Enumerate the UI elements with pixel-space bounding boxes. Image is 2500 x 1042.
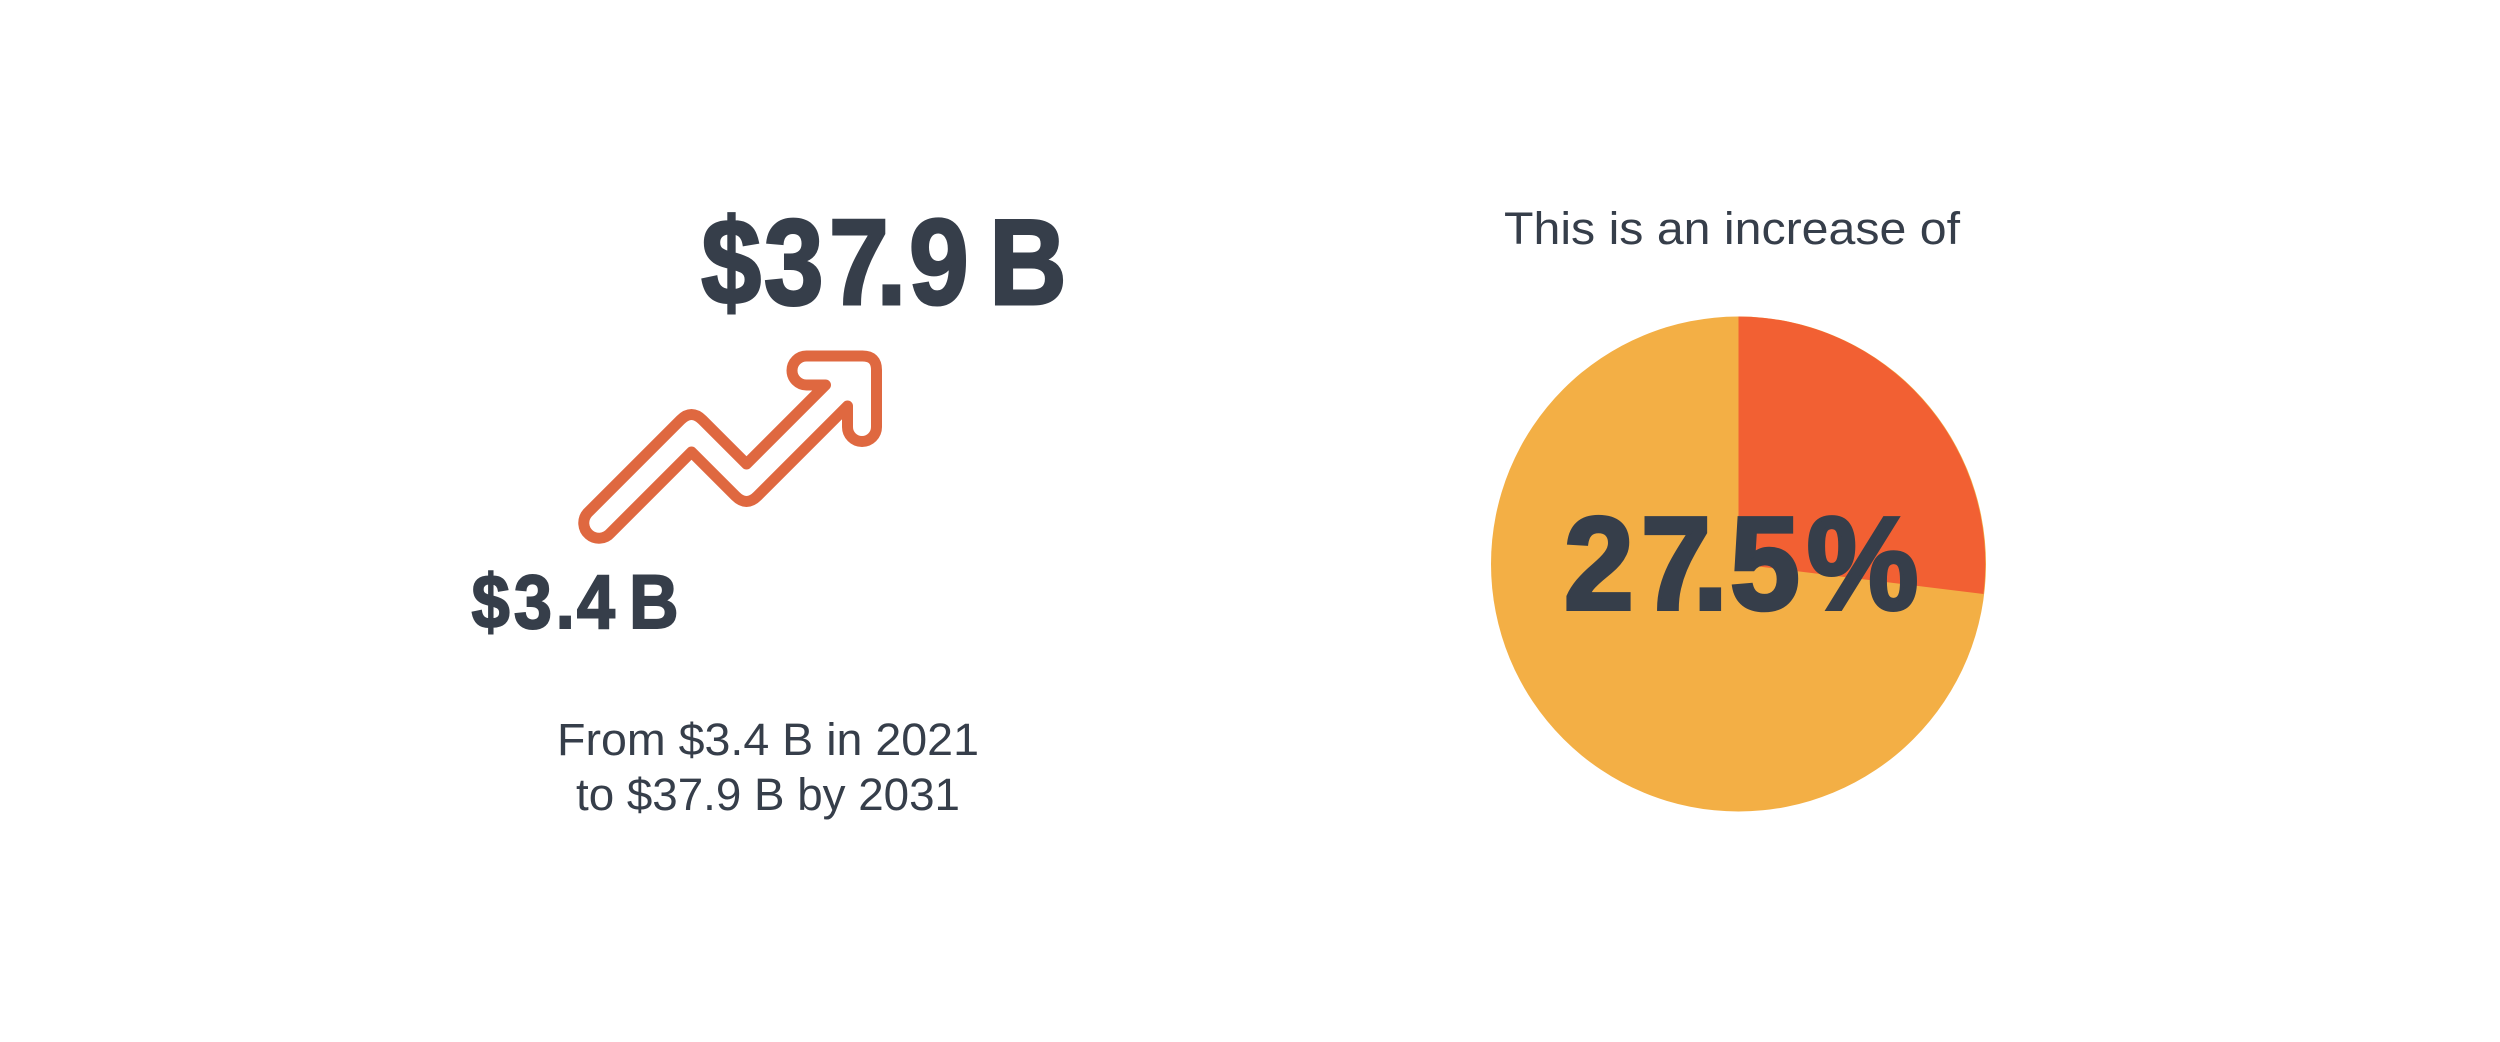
label: 27.5 percent: 27.5% (1564, 490, 1918, 638)
text block: date range (557, 714, 979, 820)
text block: date range: to $37.9 B by 2031 (576, 769, 960, 820)
heading: increase caption: This is an increase of (1504, 203, 1961, 254)
text block: date range: From $3.4 B in 2021 (557, 714, 979, 765)
panel: market growth (472, 195, 1067, 820)
panel: percentage increase (1491, 203, 1986, 812)
heading: end value: $37.9 B (701, 195, 1067, 331)
pie slice: highlighted share (1738, 316, 1985, 594)
pie chart (1491, 316, 1986, 812)
label: start value: $3.4 B (472, 561, 678, 645)
icon: rising arrow (584, 356, 876, 538)
